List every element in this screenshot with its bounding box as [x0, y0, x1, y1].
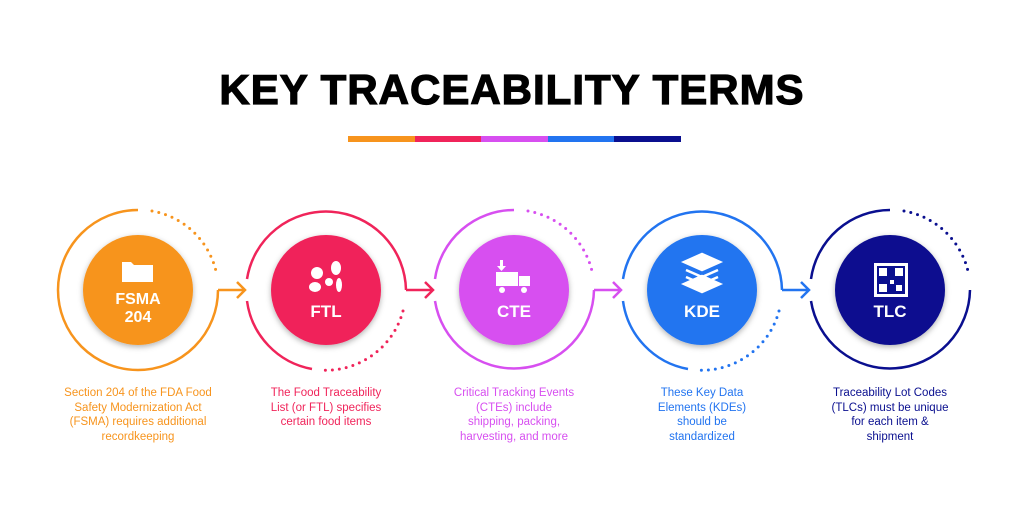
text: FTL description: The Food Traceability — [271, 387, 381, 399]
text: CTE description: Critical Tracking Events — [454, 387, 574, 399]
text: CTE description: harvesting, and more — [460, 430, 568, 442]
text: CTE description: shipping, packing, — [468, 416, 560, 428]
node: TLC: TLC — [873, 302, 907, 321]
node: CTE: CTE — [497, 302, 531, 321]
text: FSMA description — [64, 387, 212, 442]
text: TLC description: shipment — [867, 430, 913, 442]
node: KDE — [623, 212, 809, 370]
text: KDE description: standardized — [669, 430, 735, 442]
text: TLC description: Traceability Lot Codes — [833, 387, 947, 399]
node: KDE: KDE — [684, 302, 720, 321]
color bar — [348, 136, 681, 142]
text: FSMA description: (FSMA) requires additional — [70, 416, 206, 428]
text: KDE description: should be — [677, 416, 727, 428]
text: CTE description — [454, 387, 574, 442]
text: KDE description: These Key Data — [661, 387, 743, 399]
node: FTL — [247, 212, 433, 370]
text: TLC description — [832, 387, 948, 442]
title: KEY TRACEABILITY TERMS — [219, 66, 805, 113]
text: KDE description — [658, 387, 746, 442]
node: FSMA 204: FSMA — [115, 291, 161, 308]
text: FTL description: certain food items — [281, 416, 371, 428]
text: TLC description: for each item & — [851, 416, 929, 428]
text: FSMA description: Safety Modernization Act — [74, 402, 202, 414]
node: TLC — [811, 210, 970, 368]
node: FTL: FTL — [310, 302, 342, 321]
text: FTL description — [271, 387, 382, 428]
text: FSMA description: recordkeeping — [102, 430, 174, 442]
node: FSMA 204: 204 — [125, 309, 151, 326]
text: CTE description: (CTEs) include — [476, 402, 552, 414]
text: FSMA description: Section 204 of the FDA Food — [64, 387, 212, 399]
text: TLC description: (TLCs) must be unique — [832, 402, 948, 414]
text: KDE description: Elements (KDEs) — [658, 402, 746, 414]
text: FTL description: List (or FTL) specifies — [271, 402, 381, 414]
node: CTE — [435, 210, 621, 368]
node: FSMA 204 — [58, 210, 245, 370]
